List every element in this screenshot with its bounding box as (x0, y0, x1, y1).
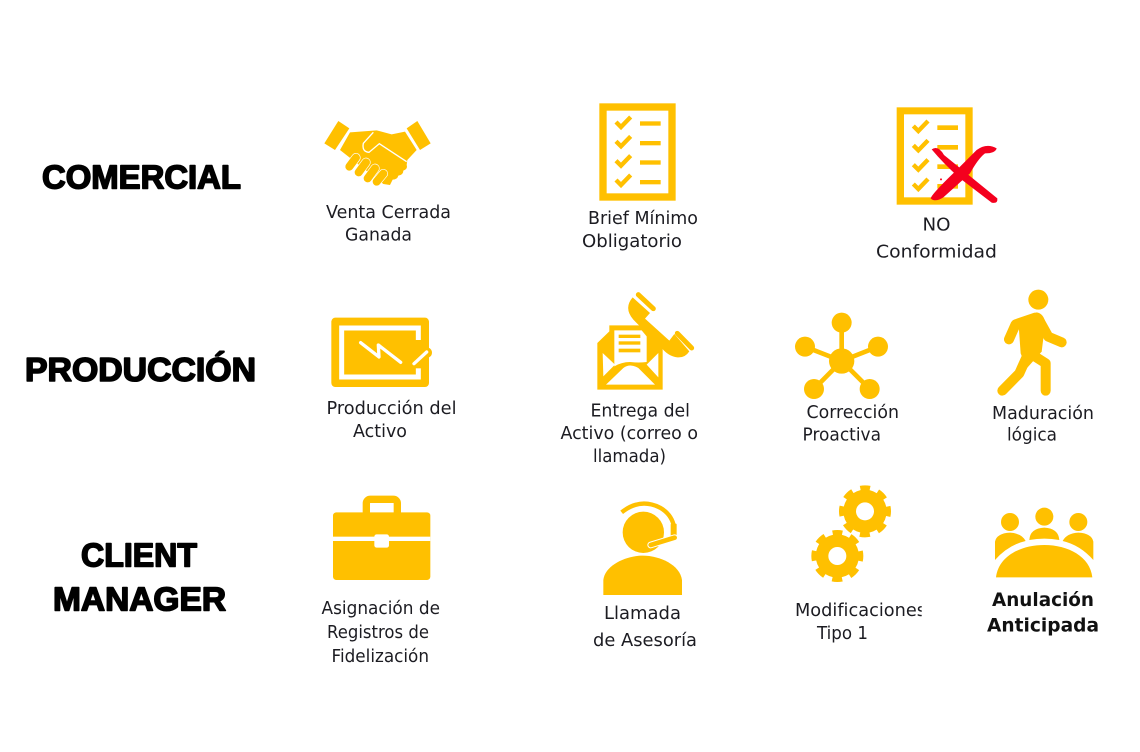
label: venta cerrada ganada: Venta Cerrada (326, 202, 451, 223)
item: brief minimo obligatorio (582, 103, 698, 252)
label: no conformidad (876, 214, 997, 262)
icon: headset agent (603, 504, 682, 595)
heading: client manager: CLIENT (81, 536, 197, 574)
label: venta cerrada ganada (326, 202, 451, 246)
label: entrega del activo: llamada) (593, 446, 666, 467)
icon: walking person (1002, 290, 1062, 391)
item: anulacion anticipada (987, 508, 1099, 636)
icon: briefcase (333, 499, 430, 580)
label: asignacion de registros de fidelizacion: Registros de (327, 622, 429, 643)
heading: client manager (53, 536, 226, 618)
label: llamada de asesoria: Llamada (604, 603, 681, 624)
label: produccion del activo: Producción del (326, 398, 456, 419)
label: maduracion logica: Maduración (992, 403, 1094, 424)
heading: comercial: COMERCIAL (42, 158, 241, 196)
label: correccion proactiva: Proactiva (802, 424, 881, 446)
label: correccion proactiva (802, 402, 899, 446)
label: correccion proactiva: Corrección (806, 402, 899, 423)
icon: gears (814, 488, 888, 579)
label: no conformidad: NO (922, 214, 950, 236)
item: asignacion de registros (322, 499, 440, 667)
label: asignacion de registros de fidelizacion: Asignación de (322, 598, 440, 619)
item: maduracion logica (992, 290, 1094, 446)
label: no conformidad: Conformidad (876, 242, 997, 262)
label: asignacion de registros de fidelizacion (322, 598, 440, 667)
icon: handshake (324, 121, 431, 185)
heading: client manager: MANAGER (53, 580, 226, 618)
label: anulacion anticipada (987, 589, 1099, 636)
label: entrega del activo: Activo (correo o (560, 423, 698, 444)
item: venta cerrada ganada (324, 121, 451, 246)
label: modificaciones tipo 1: Tipo 1 (816, 623, 868, 644)
icon: envelope and phone (597, 295, 692, 390)
item: modificaciones tipo 1 (795, 488, 932, 644)
icon: checklist (599, 103, 676, 201)
label: brief minimo obligatorio: Obligatorio (582, 231, 682, 252)
item: produccion del activo (326, 318, 456, 442)
label: entrega del activo: Entrega del (590, 400, 690, 422)
item: correccion proactiva (795, 313, 899, 446)
panel: client manager row (53, 488, 1099, 667)
label: brief minimo obligatorio (582, 208, 698, 252)
label: anulacion anticipada: Anulación (992, 589, 1094, 611)
label: maduracion logica: lógica (1007, 424, 1057, 446)
icon: checklist crossed out (897, 107, 997, 205)
panel: comercial row (42, 103, 997, 263)
label: modificaciones tipo 1 (795, 598, 932, 644)
panel: produccion row (25, 290, 1094, 467)
label: modificaciones tipo 1: Modificaciones (795, 600, 926, 621)
item: llamada de asesoria (593, 504, 697, 651)
label: anulacion anticipada: Anticipada (987, 614, 1099, 636)
label: venta cerrada ganada: Ganada (345, 224, 412, 246)
label: asignacion de registros de fidelizacion: Fidelización (332, 646, 429, 667)
item: no conformidad (876, 107, 997, 262)
icon: network (795, 313, 888, 399)
icon: drawing tablet (331, 318, 432, 387)
label: entrega del activo (560, 400, 698, 467)
label: llamada de asesoria (593, 603, 697, 651)
label: maduracion logica (992, 403, 1094, 446)
heading: produccion: PRODUCCIÓN (25, 351, 256, 388)
item: entrega del activo (560, 295, 698, 467)
label: brief minimo obligatorio: Brief Mínimo (588, 208, 698, 229)
label: llamada de asesoria: de Asesoría (593, 630, 697, 651)
icon: red cross (931, 146, 997, 203)
label: produccion del activo: Activo (353, 421, 407, 442)
label: produccion del activo (326, 398, 456, 442)
icon: people around a table (995, 508, 1093, 577)
